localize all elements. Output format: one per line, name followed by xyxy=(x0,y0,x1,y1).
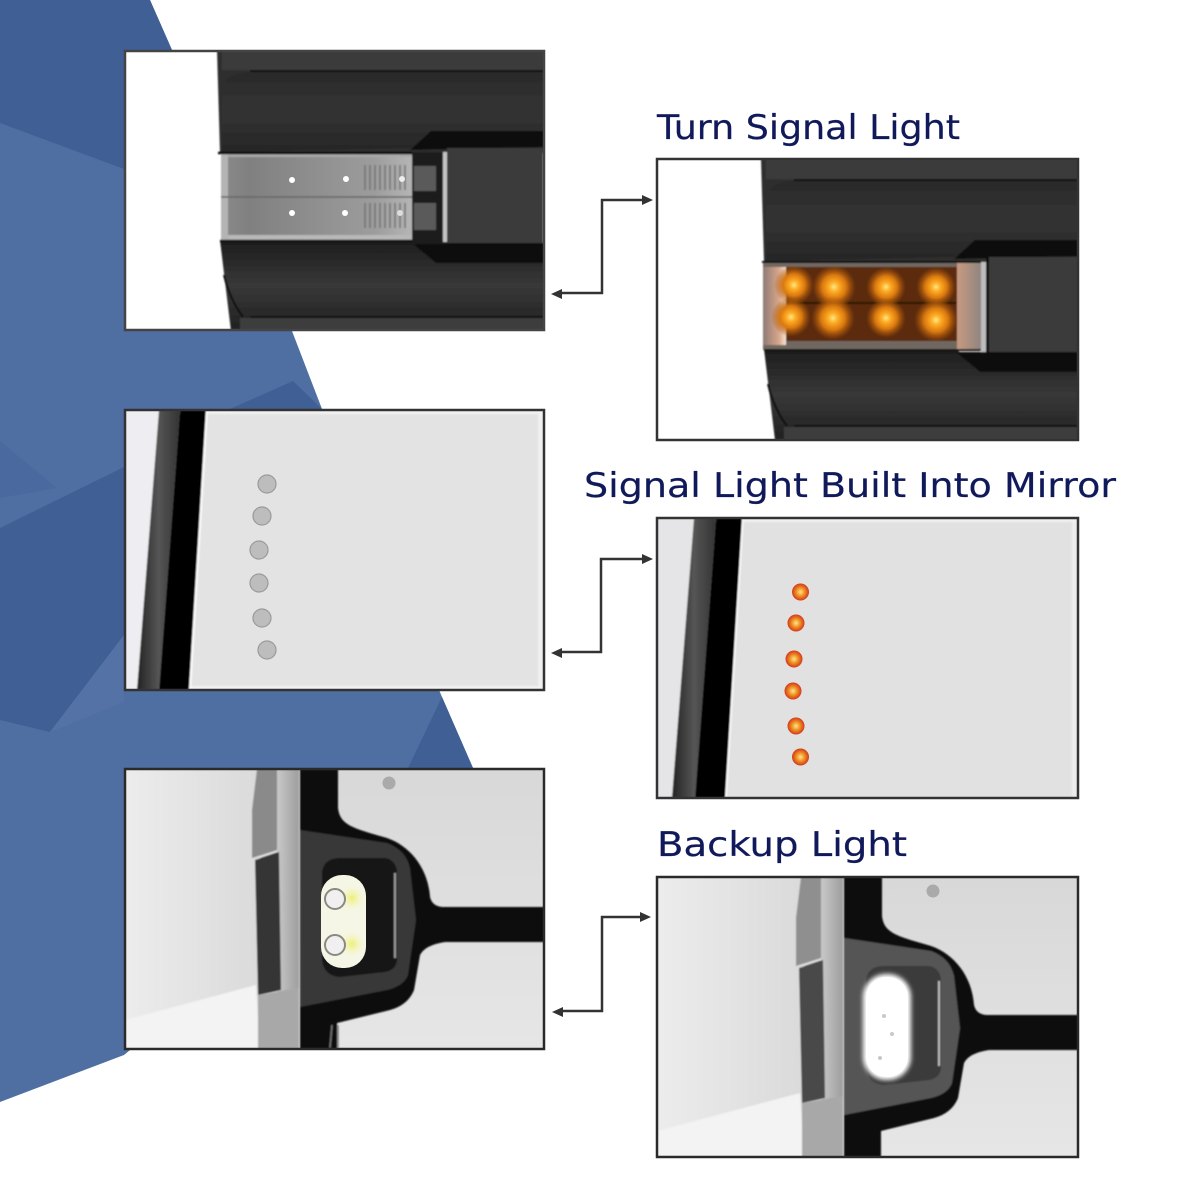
arrow: turn signal link xyxy=(551,195,653,299)
dots: lit red LEDs xyxy=(784,584,809,766)
panel: backup light on, right xyxy=(657,877,1088,1157)
panel: turn signal off, left xyxy=(125,50,545,331)
arrow: signal mirror link xyxy=(551,554,653,658)
panel: backup light off, left xyxy=(125,769,544,1049)
icon: backup LEDs lit xyxy=(863,974,911,1080)
heading: Signal Light Built Into Mirror: Signal Light Built Into Mirror xyxy=(584,466,1116,506)
heading: Backup Light: Backup Light xyxy=(657,825,907,865)
background: blue polygon shape xyxy=(0,0,473,1102)
panel: signal mirror off, left xyxy=(125,410,544,690)
dots: unlit LEDs xyxy=(250,475,276,659)
icon: amber LEDs lit xyxy=(771,265,958,342)
icon: backup LEDs unlit xyxy=(321,875,366,968)
panel: turn signal on, right xyxy=(657,159,1089,440)
arrow: backup light link xyxy=(552,912,651,1017)
heading: Turn Signal Light: Turn Signal Light xyxy=(656,108,960,148)
panel: signal mirror on, right xyxy=(657,518,1078,798)
